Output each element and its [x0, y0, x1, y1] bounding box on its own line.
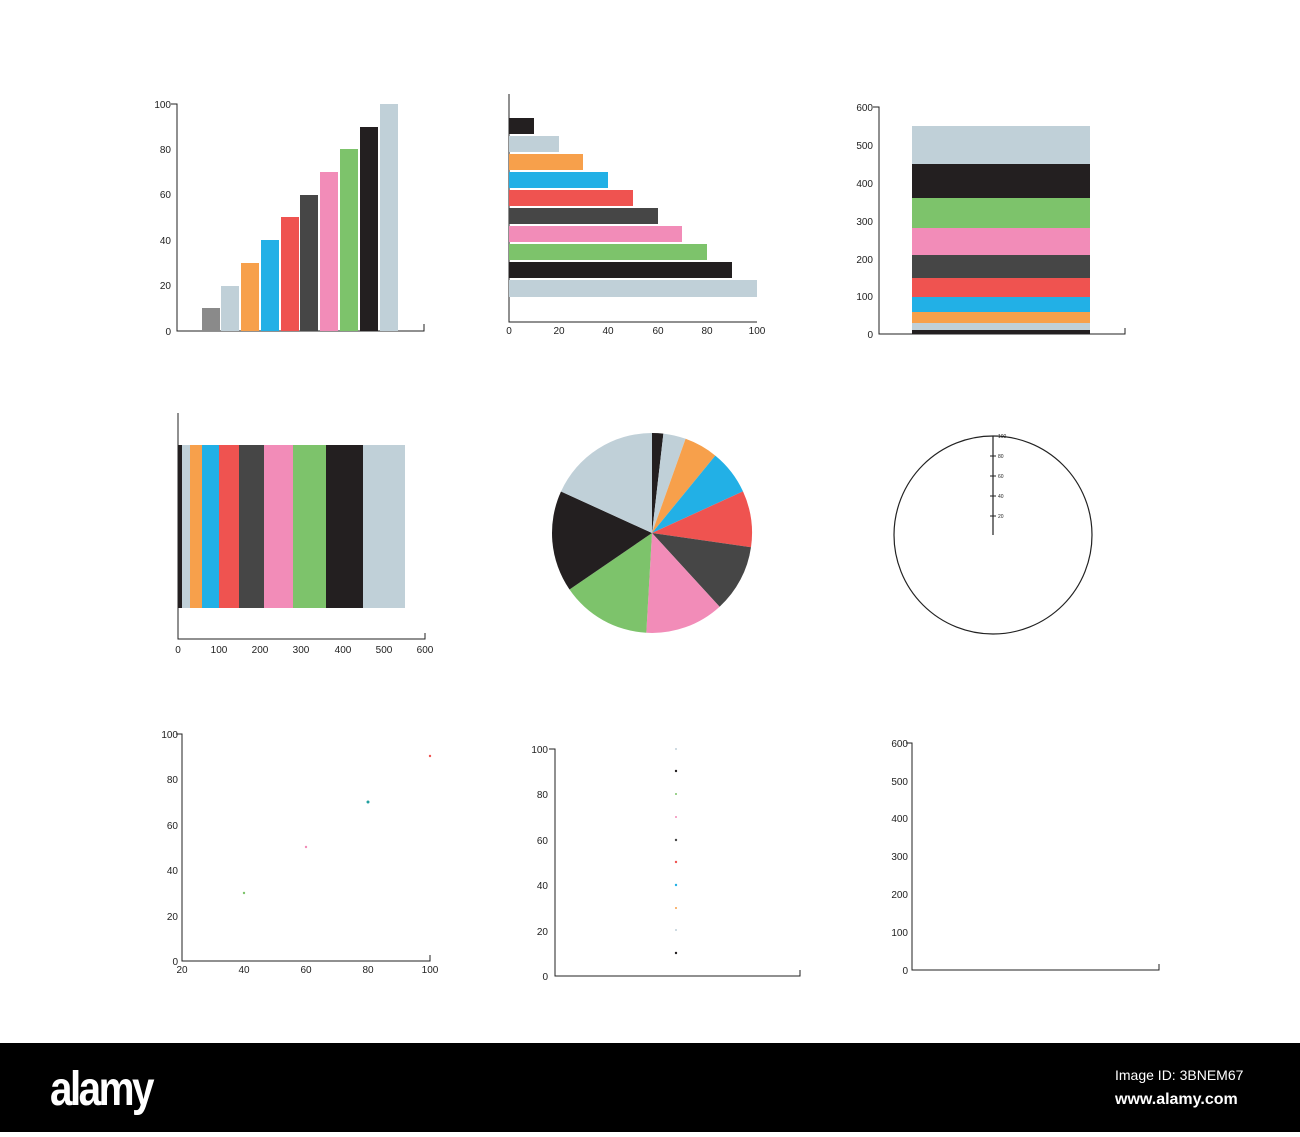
chart: stacked vertical bar: 100	[856, 292, 873, 303]
chart: scatter plot	[161, 730, 439, 976]
chart: dot plot	[531, 745, 800, 983]
chart: empty axes: 0	[902, 966, 908, 977]
chart: empty axes: 100	[891, 928, 908, 939]
chart: horizontal bar chart	[506, 94, 766, 337]
chart: radial circle gauge: 20	[998, 514, 1004, 520]
chart: scatter plot: 40	[167, 866, 178, 877]
chart: stacked horizontal bar: 0	[175, 645, 181, 656]
chart: stacked horizontal bar: 500	[376, 645, 393, 656]
chart: empty axes: 500	[891, 777, 908, 788]
chart: stacked vertical bar: 400	[856, 179, 873, 190]
chart: radial circle gauge: 60	[998, 474, 1004, 480]
chart: dot plot: 40	[537, 881, 548, 892]
chart: vertical bar chart: 40	[160, 236, 171, 247]
chart: empty axes: 400	[891, 814, 908, 825]
chart: dot plot: 80	[537, 790, 548, 801]
chart: radial circle gauge	[894, 434, 1092, 634]
chart: empty axes	[891, 739, 1159, 977]
chart: vertical bar chart: 20	[160, 281, 171, 292]
chart: scatter plot: 60	[300, 965, 312, 976]
chart: stacked vertical bar	[856, 103, 1125, 341]
chart: scatter plot: 0	[172, 957, 178, 968]
chart: vertical bar chart: 100	[154, 100, 171, 111]
chart: horizontal bar chart: 60	[652, 326, 664, 337]
chart: scatter plot: 20	[167, 912, 178, 923]
footer banner: Image ID: 3BNEM67	[1115, 1067, 1244, 1083]
chart: dot plot: 60	[537, 836, 548, 847]
chart: horizontal bar chart: 20	[553, 326, 565, 337]
chart: stacked horizontal bar	[175, 413, 434, 656]
chart: stacked horizontal bar: 100	[211, 645, 228, 656]
chart: vertical bar chart: 60	[160, 190, 171, 201]
chart: scatter plot: 100	[161, 730, 178, 741]
chart: stacked horizontal bar: 300	[293, 645, 310, 656]
chart: vertical bar chart	[154, 100, 424, 338]
chart: scatter plot: 100	[422, 965, 439, 976]
chart: radial circle gauge: 80	[998, 454, 1004, 460]
chart: stacked horizontal bar: 600	[417, 645, 434, 656]
chart: vertical bar chart: 0	[165, 327, 171, 338]
chart: horizontal bar chart: 0	[506, 326, 512, 337]
chart: stacked vertical bar: 500	[856, 141, 873, 152]
chart: scatter plot: 80	[362, 965, 374, 976]
chart: dot plot: 0	[542, 972, 548, 983]
footer banner: alamy	[50, 1063, 155, 1116]
footer banner	[0, 1043, 1300, 1132]
chart: empty axes: 200	[891, 890, 908, 901]
chart: empty axes: 600	[891, 739, 908, 750]
chart: vertical bar chart: 80	[160, 145, 171, 156]
chart: stacked horizontal bar: 200	[252, 645, 269, 656]
chart: scatter plot: 20	[176, 965, 188, 976]
chart: stacked vertical bar: 300	[856, 217, 873, 228]
chart: radial circle gauge: 40	[998, 494, 1004, 500]
chart: stacked vertical bar: 600	[856, 103, 873, 114]
chart: horizontal bar chart: 100	[749, 326, 766, 337]
chart: horizontal bar chart: 80	[701, 326, 713, 337]
chart: scatter plot: 60	[167, 821, 178, 832]
chart: pie chart	[552, 433, 752, 633]
chart: stacked vertical bar: 200	[856, 255, 873, 266]
chart: stacked horizontal bar: 400	[335, 645, 352, 656]
chart: stacked vertical bar: 0	[867, 330, 873, 341]
chart: scatter plot: 80	[167, 775, 178, 786]
chart: dot plot: 20	[537, 927, 548, 938]
chart: scatter plot: 40	[238, 965, 250, 976]
chart: empty axes: 300	[891, 852, 908, 863]
chart: radial circle gauge: 100	[998, 434, 1007, 440]
chart: horizontal bar chart: 40	[602, 326, 614, 337]
chart: dot plot: 100	[531, 745, 548, 756]
footer banner: www.alamy.com	[1114, 1091, 1238, 1108]
